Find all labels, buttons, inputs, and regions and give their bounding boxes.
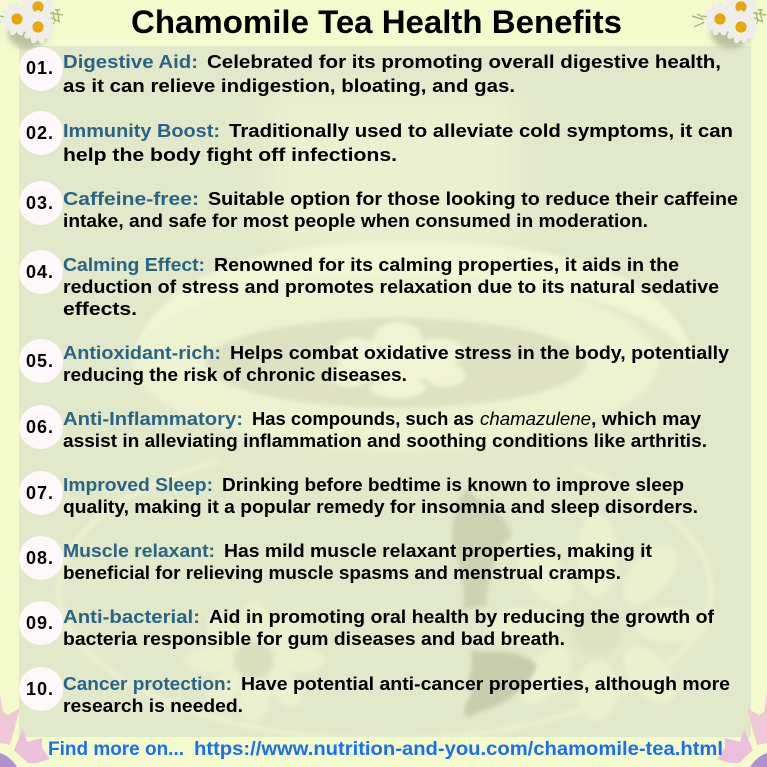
number badge 07 xyxy=(19,471,63,515)
text 08: Muscle relaxant: xyxy=(63,541,215,561)
text 03: Caffeine-free: xyxy=(63,189,199,209)
text 02: Traditionally used to alleviate cold symptoms, it can xyxy=(229,121,733,141)
text 01: Celebrated for its promoting overall digestive health, xyxy=(207,52,721,72)
item 08 xyxy=(19,536,652,583)
text 08 xyxy=(63,541,652,583)
text 04 xyxy=(63,255,719,319)
item 10 xyxy=(19,667,730,716)
text 05 xyxy=(63,343,729,385)
text 03: Suitable option for those looking to reduce their caffeine xyxy=(208,189,738,209)
text 06: chamazulene xyxy=(480,409,591,429)
number badge 01 xyxy=(19,47,63,91)
text 08: beneficial for relieving muscle spasms and menstrual cramps. xyxy=(63,563,621,583)
text 01: as it can relieve indigestion, bloating, and gas. xyxy=(63,76,515,96)
number badge 03 xyxy=(19,181,63,225)
text 10 xyxy=(63,674,730,716)
text 06: Anti-Inflammatory: xyxy=(63,409,243,429)
text 02: help the body fight off infections. xyxy=(63,145,397,165)
title: Chamomile Tea Health Benefits xyxy=(131,4,622,40)
text 01: Digestive Aid: xyxy=(63,52,198,72)
text 08: Has mild muscle relaxant properties, making it xyxy=(224,541,652,561)
number badge 02 xyxy=(19,111,63,155)
number badge 06 xyxy=(19,405,63,449)
text 02 xyxy=(63,121,733,165)
text 05: Antioxidant-rich: xyxy=(63,343,221,363)
number badge 02: 02. xyxy=(26,123,53,143)
text 05: reducing the risk of chronic diseases. xyxy=(63,365,407,385)
text 06: , which may xyxy=(591,409,701,429)
number badge 03: 03. xyxy=(26,193,53,213)
number badge 06: 06. xyxy=(26,417,53,437)
number badge 01: 01. xyxy=(26,58,53,78)
footer strip xyxy=(0,737,767,767)
text 04: Renowned for its calming properties, it aids in the xyxy=(214,255,679,275)
footer link text: Find more on... xyxy=(48,739,184,760)
text 09: Anti-bacterial: xyxy=(63,607,200,627)
text 07: quality, making it a popular remedy for insomnia and sleep disorders. xyxy=(63,497,698,517)
icon: pink petals bottom left xyxy=(0,693,50,767)
text 09 xyxy=(63,607,715,649)
number badge 08 xyxy=(19,536,63,580)
text 02: Immunity Boost: xyxy=(63,121,220,141)
item 03 xyxy=(19,181,738,231)
text 10: Cancer protection: xyxy=(63,674,232,694)
text 03: intake, and safe for most people when consumed in moderation. xyxy=(63,211,648,231)
item 05 xyxy=(19,339,729,385)
number badge 09: 09. xyxy=(26,613,53,633)
text 01 xyxy=(63,52,721,96)
text 07: Improved Sleep: xyxy=(63,475,213,495)
number badge 07: 07. xyxy=(26,483,53,503)
text 07: Drinking before bedtime is known to improve sleep xyxy=(222,475,684,495)
number badge 08: 08. xyxy=(26,548,53,568)
text 05: Helps combat oxidative stress in the body, potentially xyxy=(230,343,729,363)
text 04: Calming Effect: xyxy=(63,255,205,275)
number badge 04 xyxy=(19,250,63,294)
item 07 xyxy=(19,471,698,517)
text 06: assist in alleviating inflammation and soothing conditions like arthritis. xyxy=(63,431,707,451)
item 04 xyxy=(19,250,719,319)
number badge 05: 05. xyxy=(26,351,53,371)
item 01 xyxy=(19,47,721,96)
item 06 xyxy=(19,405,707,451)
number badge 10 xyxy=(19,667,63,711)
text 10: Have potential anti-cancer properties, although more xyxy=(241,674,730,694)
text 09: bacteria responsible for gum diseases and bad breath. xyxy=(63,629,565,649)
text 07 xyxy=(63,475,698,517)
text 06: Has compounds, such as xyxy=(252,409,474,429)
footer link text: https://www.nutrition-and-you.com/chamomile-tea.html xyxy=(194,739,723,760)
icon: chamomile flowers top left xyxy=(0,0,63,48)
text 04: effects. xyxy=(63,299,137,319)
number badge 04: 04. xyxy=(26,262,53,282)
number badge 10: 10. xyxy=(26,679,53,699)
text 06 xyxy=(63,409,707,451)
text 04: reduction of stress and promotes relaxation due to its natural sedative xyxy=(63,277,719,297)
number badge 05 xyxy=(19,339,63,383)
text 09: Aid in promoting oral health by reducing the growth of xyxy=(209,607,715,627)
item 09 xyxy=(19,601,715,649)
item 02 xyxy=(19,111,733,165)
icon: pink petals bottom right xyxy=(717,693,767,767)
icon: chamomile flowers top right xyxy=(692,0,766,48)
text 03 xyxy=(63,189,738,231)
number badge 09 xyxy=(19,601,63,645)
text 10: research is needed. xyxy=(63,696,243,716)
